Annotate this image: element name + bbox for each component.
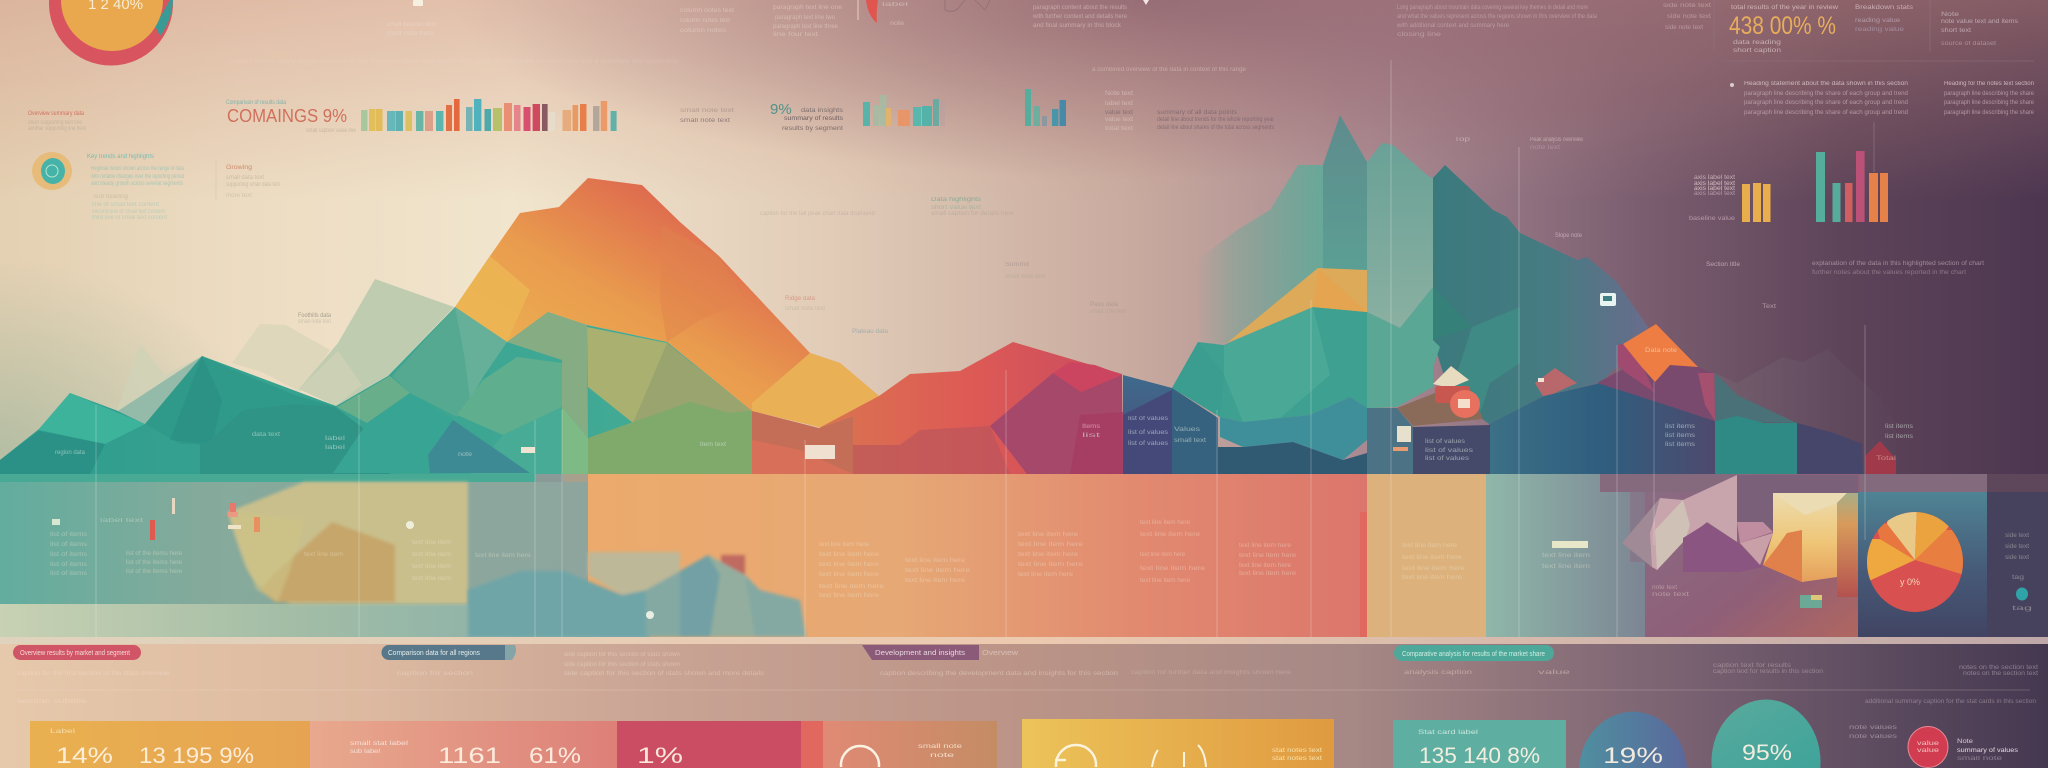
mountain inner text: Values (1174, 427, 1200, 433)
stat card: teal: Stat card label (1418, 730, 1478, 736)
top text row: short note here (386, 31, 435, 37)
stat circle: red with notes: note values (1849, 725, 1897, 731)
lower panel text columns: text line item here (905, 558, 966, 564)
mountain: navy block (1123, 375, 1218, 474)
stat card: yellow with gauges: stat notes text (1272, 756, 1322, 762)
lower panel text columns: text line item here (1239, 553, 1297, 559)
mountain inner text: data text (252, 432, 280, 438)
lower panel text columns: list of items (50, 562, 87, 568)
lower panel text columns: list of items (50, 571, 87, 577)
text block: small callout (216, 160, 280, 200)
percent callout with text: small note text (680, 118, 730, 124)
pie chart: y 0% (1900, 577, 1920, 587)
small white pointer (1143, 0, 1149, 5)
text block: lower centre notes: small caption for details here (931, 211, 1015, 217)
lower panel text columns: list of the items here (126, 569, 183, 575)
bottom captions: caption for section (397, 671, 473, 677)
stat circle: red with notes: small note (1957, 756, 2003, 762)
text block: top right paragraph: side note text (1665, 25, 1703, 31)
mountain inner text: list items (1885, 434, 1913, 440)
stat card: orange: 13 195 9% (139, 743, 254, 768)
lower panel text columns: text line item here (1018, 572, 1074, 578)
stat circle: teal (1712, 700, 1821, 768)
lower panel text columns: text line item here (1018, 532, 1079, 538)
stat card: teal: 135 140 8% (1419, 743, 1540, 768)
text block: right paragraphs: Heading statement about the data shown in this section (1744, 81, 1908, 87)
mountain inner text: list of values (1128, 416, 1168, 422)
lower panel text columns: label text (100, 518, 144, 524)
stat card: yellow with gauges: stat notes text (1272, 748, 1322, 754)
mountain labels: small note text (785, 306, 825, 312)
text block: right paragraphs: paragraph line describing the share (1944, 100, 2035, 106)
text block: teal note: third line of small text content (92, 215, 167, 221)
text block: far top right: source of dataset (1941, 41, 1996, 47)
stat circle: red with notes: Note (1957, 739, 1974, 745)
lower panel text columns: text line item (1542, 564, 1590, 570)
heading: comparison percentage: small caption value line (306, 128, 357, 134)
percent callout with text: small note text (680, 108, 734, 114)
stat card: pink: sub label (350, 749, 380, 755)
stat circle: red with notes: value (1917, 741, 1940, 747)
left top labels: short supporting text line (28, 120, 83, 126)
icon: red crescent (858, 0, 878, 23)
heading: comparison percentage: Comparison of results data (226, 100, 287, 106)
stat circle: teal: 95% (1742, 740, 1792, 765)
mountain inner text: list of values (1425, 448, 1473, 454)
left top labels: another supporting line here (28, 126, 87, 132)
mountain: red foothill (752, 411, 853, 474)
text block: far top right: Note (1941, 12, 1960, 18)
bottom captions (17, 652, 2038, 705)
stat card: pink: 1161 (438, 743, 501, 768)
mountain: navy and teal foreground (1413, 324, 1896, 474)
left top labels: Overview summary data (28, 111, 85, 117)
top left ring chart (49, 0, 173, 66)
lower panel text columns: text line item here (1140, 566, 1206, 572)
mountain labels: Foothills data (298, 313, 332, 319)
bar chart: right coloured bars: axis label text (1694, 186, 1735, 192)
mountain inner text: list (1082, 433, 1101, 439)
bar chart: right coloured bars (1689, 122, 1888, 222)
percent callout with text (680, 101, 843, 132)
stat block: large orange percentage: reading value (1855, 27, 1905, 33)
top text row: paragraph text line one (773, 5, 843, 11)
text block: lower centre notes: short value text (931, 205, 981, 211)
sketch mark (945, 0, 990, 11)
stat card: orange: 14% (56, 743, 113, 768)
lower panel: base strips (0, 474, 2048, 637)
top text row: paragraph content about the results (1033, 5, 1127, 11)
stat block: large orange percentage: reading value (1855, 18, 1901, 24)
text block: lower centre notes (760, 197, 1015, 217)
text block: centre right notes: value text (1105, 110, 1133, 116)
text block: top right paragraph: side note text (1667, 14, 1711, 20)
lower panel text columns: text line item here (819, 552, 880, 558)
lower panel text columns: text line item (412, 552, 451, 558)
bottom section background (0, 644, 2048, 768)
text block: teal note: Regional trends shown across the range of data (91, 166, 184, 172)
stat block: large orange percentage (1714, 0, 2034, 61)
lower panel text columns: text line item here (1140, 520, 1191, 526)
bottom captions: side caption for this section of stats shown (564, 652, 680, 658)
mountain: green range (0, 307, 752, 482)
mountain inner text: list of values (1128, 430, 1168, 436)
lower panel text columns: text line item (412, 564, 451, 570)
text block: top right paragraph: closing line (1397, 32, 1442, 38)
percent callout with text: results by segment (782, 126, 843, 132)
lower panel text columns: side text (2005, 533, 2029, 539)
lower panel text columns: text line item here (475, 553, 532, 559)
bar chart: right coloured bars: axis label text (1694, 191, 1735, 197)
pill label: red: Overview results by market and segment (20, 650, 130, 657)
text block: lower centre notes: caption for the tall peak chart data displayed (760, 211, 875, 217)
top text row: paragraph text line two (775, 15, 836, 21)
text block: right paragraphs: paragraph line describing the share (1944, 91, 2035, 97)
mountain labels: Text (1762, 304, 1776, 310)
text block: teal note: and steady growth across several segments (91, 181, 183, 187)
mountain labels: Pass data (1090, 302, 1119, 308)
stat card: yellow with gauges (1022, 719, 1334, 768)
stat block: large orange percentage: 438 00% % (1729, 12, 1836, 40)
stat card: pink: small stat label (350, 741, 408, 747)
text block: centre right notes: label text (1105, 101, 1133, 107)
stat card: pink (310, 721, 617, 768)
text block: right paragraphs (1730, 81, 2035, 116)
text block: small callout: Growing (226, 165, 252, 171)
top text row: column notes text (680, 8, 734, 14)
top text row: paragraph text line three (773, 24, 839, 30)
text block: centre right notes: detail line about shares of the total across segments (1157, 125, 1274, 131)
text block: top right paragraph: with additional context and summary here (1396, 23, 1510, 29)
text block: centre right notes: summary of all data points (1157, 110, 1237, 116)
pill label: purple (862, 645, 1019, 660)
mountain labels: Top (1454, 137, 1471, 143)
mountain inner text: list of values (1128, 441, 1168, 447)
divider band (0, 637, 2048, 644)
lower panel text columns: text line item here (819, 572, 880, 578)
text block: teal note: Sub heading (93, 194, 128, 200)
stat card: teal (1393, 720, 1566, 768)
stat block: large orange percentage: Breakdown stats (1855, 5, 1913, 11)
top text row: insights across every region overview of the mountain range data points with detail about results for each year and a summary line continuing (228, 59, 678, 65)
lower panel text columns: text line item here (1018, 562, 1084, 568)
bottom captions: analysis caption (1404, 670, 1472, 676)
text block: small callout: small data text (226, 175, 264, 181)
text block: small callout: more text (226, 193, 252, 199)
lower panel text columns: list of items (50, 532, 87, 538)
mountain inner text: region data (55, 450, 86, 456)
lower panel text columns: text line item here (1018, 542, 1084, 548)
mountain inner text: label (325, 436, 345, 442)
icon: spiral badge (32, 152, 72, 190)
vertical guide lines (96, 60, 1865, 637)
mountain labels: Section title (1706, 262, 1741, 268)
mountain inner text: list of values (1425, 439, 1465, 445)
house and icons on the mountain (1393, 293, 1616, 451)
percent callout with text: 9% (770, 101, 792, 118)
bottom captions: caption text for results in this section (1713, 669, 1823, 675)
stat card: red (617, 721, 823, 768)
lower panel: teal hills (468, 552, 806, 637)
lower panel text columns: list of the items here (126, 560, 183, 566)
top text row: note (890, 21, 905, 27)
mountain labels: Peak analysis overview (1530, 137, 1584, 143)
stat card: salmon with ring (823, 721, 997, 768)
lower panel: yellow hill shape (228, 482, 468, 604)
lower panel text columns: text line item (304, 552, 343, 558)
lower panel text columns: text line item here (1239, 543, 1292, 549)
heading: comparison percentage: COMAINGS 9% (227, 105, 347, 126)
pill label: purple: Overview (982, 650, 1019, 657)
bottom captions: additional summary caption for the stat cards in this section (1865, 699, 2036, 705)
lower panel: small markers (52, 445, 1822, 619)
bottom captions: caption for further data and insights shown here (1131, 670, 1292, 676)
lower panel text columns: text line item here (819, 584, 885, 590)
bottom captions: notes on the section text (1959, 665, 2038, 671)
lower panel text columns: list of items (50, 542, 87, 548)
top text row: with further context and details here (1032, 14, 1128, 20)
top text row: small header text (386, 22, 436, 28)
text block: top right paragraph: side note text (1663, 3, 1711, 9)
bar chart: multi-colour strip (361, 99, 617, 131)
mountain inner text: small text (1174, 438, 1206, 444)
text block: centre right notes: detail line about trends for the whole reporting year (1157, 117, 1274, 123)
text block: far top right: note value text and items (1941, 19, 2018, 25)
mountain: gold peak (1227, 268, 1367, 343)
mountain inner text: list items (1665, 433, 1695, 439)
text block: top right paragraph: Long paragraph about mountain data covering several key themes in detail and more (1397, 5, 1589, 11)
stat circle: blue (1579, 712, 1687, 768)
mountain labels: small note text (298, 319, 331, 325)
lower panel text columns: text line item here (1239, 563, 1292, 569)
lower panel text columns: list of the items here (126, 551, 183, 557)
lower panel text columns: text line item here (819, 593, 880, 599)
text block: right paragraphs: paragraph line describing the share (1944, 110, 2035, 116)
text block: centre right notes: a combined overview of the data in context of this range (1092, 67, 1247, 73)
percent callout with text: summary of results (784, 116, 843, 122)
text block: teal note (87, 154, 184, 221)
stat card: orange (30, 721, 310, 768)
faint back mountains (117, 279, 454, 411)
mountain labels: note text (1530, 145, 1560, 151)
text block: far top right: short text (1941, 28, 1971, 34)
mountain labels: Ridge data (785, 296, 816, 302)
stat card: red: 1% (637, 743, 683, 768)
text block: top right paragraph (1396, 3, 1711, 38)
lower panel text columns: text line item here (905, 578, 966, 584)
bottom captions: side caption for this section of stats shown and more details (564, 671, 764, 677)
top text row: label (882, 2, 908, 8)
mountain: far right faint ridge (1714, 349, 1897, 473)
stat circle: red with notes: value (1917, 748, 1940, 754)
top text row (228, 2, 1128, 65)
mountain: orange red peak (455, 178, 879, 428)
pill label: teal: Comparative analysis for results of the market share (1402, 651, 1545, 658)
bottom captions: section subtitle (17, 699, 88, 705)
lower panel text columns: text line item (412, 576, 451, 582)
text block: teal note: Key trends and highlights (87, 154, 154, 160)
stat block: large orange percentage: data reading (1733, 40, 1781, 46)
mountain inner text: note (458, 452, 473, 458)
lower panel text columns: text line item here (1140, 532, 1201, 538)
top text row: and final summary in this block (1033, 23, 1122, 29)
text block: teal note: line of small text content (92, 202, 159, 208)
mountain: tall teal peak (1195, 115, 1650, 474)
mountain: teal central range (1172, 307, 1367, 474)
lower panel text columns: text line item here (1239, 571, 1297, 577)
text block: right paragraphs: paragraph line describing the share of each group and trend (1744, 100, 1908, 106)
bottom captions: value (1538, 670, 1571, 676)
lower panel text columns: list of items (50, 552, 87, 558)
mountain inner text: item text (700, 442, 726, 448)
stat circle: red with notes: summary of values (1957, 748, 2018, 754)
lower panel text columns: tag (2012, 575, 2024, 581)
text block: lower centre notes: Data highlights (931, 197, 981, 203)
icon: teal drop (2016, 588, 2028, 600)
mountain inner text: list items (1665, 442, 1695, 448)
mountain labels: Plateau data (852, 329, 889, 335)
bar chart: small teal bars (1025, 89, 1066, 126)
lower panel text columns: note text (1652, 592, 1690, 598)
bar chart: right coloured bars: axis label text (1694, 181, 1735, 187)
stat block: large orange percentage: short caption (1733, 48, 1781, 54)
text block: far top right (1930, 0, 2018, 52)
mountain inner text: list items (1665, 424, 1695, 430)
mountain inner text: Total (1876, 456, 1896, 462)
text block: teal note: second line of small text content (92, 209, 165, 215)
pill label: teal (1394, 645, 1554, 661)
text block: right paragraphs: paragraph line describing the share of each group and trend (1744, 91, 1908, 97)
lower panel text columns: text line item here (1402, 566, 1466, 572)
lower panel text columns: text line item here (819, 562, 880, 568)
lower panel text columns: side text (2005, 544, 2029, 550)
lower panel text columns: text line item here (1140, 578, 1191, 584)
mountain inner text: list items (1885, 424, 1913, 430)
lower panel text columns: text line item here (819, 542, 870, 548)
text block: centre right notes: Note text (1105, 91, 1133, 97)
lower panel text columns: side text (2005, 555, 2029, 561)
pill label: blue (382, 645, 516, 660)
mountain inner text: list of values (1425, 456, 1469, 462)
percent callout with text: data insights (801, 108, 843, 114)
lower panel text columns: text line item here (1018, 552, 1079, 558)
text block: right paragraphs: paragraph line describing the share of each group and trend (1744, 110, 1908, 116)
stat circle: red with notes (1849, 725, 2018, 768)
lower panel text columns: text line item here (1402, 575, 1463, 581)
lower panel text columns: text line item here (905, 568, 971, 574)
stat card: salmon with ring: small note (918, 744, 963, 750)
pill label: purple: Development and insights (875, 650, 966, 657)
stat card: orange: Label (50, 729, 75, 735)
top text row: line four text (773, 32, 818, 38)
stat circle: blue: 19% (1603, 743, 1663, 768)
lower panel text columns: text line item here (1402, 543, 1458, 549)
text block: centre right notes: total text (1105, 126, 1133, 132)
stat circle: red with notes: note values (1849, 734, 1897, 740)
lower panel text columns: text line item here (1402, 555, 1463, 561)
stat card: pink: 61% (529, 743, 581, 768)
text block: centre right notes: value text (1105, 117, 1133, 123)
lower panel text columns: text line item here (1140, 552, 1186, 558)
text block: top right paragraph: and what the values represent across the regions shown in this overview of the data (1397, 14, 1598, 20)
lower panel text columns: text line item (412, 540, 451, 546)
mountain labels: explanation of the data in this highlighted section of chart (1812, 261, 1984, 267)
top small marker (413, 0, 423, 6)
top text row: column notes (680, 28, 726, 34)
lower panel text columns: note text (1652, 585, 1677, 591)
mountain inner text: Items (1082, 424, 1100, 430)
mountain labels: small note text (1005, 274, 1045, 280)
pie chart (1867, 512, 1963, 612)
pill label: blue: Comparison data for all regions (388, 650, 480, 657)
mountain inner text: label (325, 445, 345, 451)
bar chart: centre cluster (863, 95, 945, 126)
mountain labels: Data note (1645, 348, 1678, 354)
lower panel text columns (50, 518, 2032, 612)
top text row: column notes text (680, 18, 730, 24)
mountain: red peak (819, 342, 1123, 474)
stat block: large orange percentage: total results of the year in review (1731, 5, 1839, 11)
text block: teal note: with notable changes over the reporting period (90, 174, 184, 180)
mountain labels: further notes about the values reported in the chart (1812, 270, 1966, 276)
pill label: red (13, 645, 141, 660)
text block: centre right notes (1092, 67, 1274, 132)
lower panel text columns: tag (2012, 606, 2032, 612)
bottom captions: caption for the first section of the stats overview (17, 671, 170, 677)
bottom captions: side caption for this section of stats shown (564, 662, 680, 668)
text block: right paragraphs: Heading for the notes text section (1944, 81, 2034, 87)
mountain labels: Summit (1005, 262, 1029, 268)
mountain labels (298, 137, 1984, 354)
left top labels (28, 111, 87, 132)
bar chart: right coloured bars: axis label text (1694, 175, 1735, 181)
mountain labels: small note text (1090, 309, 1126, 315)
heading: comparison percentage (226, 100, 357, 134)
lower panel: facet polygons (1622, 475, 1858, 597)
lower panel text columns: text line item (1542, 553, 1590, 559)
bottom captions: notes on the section text (1963, 671, 2038, 677)
bottom captions: caption text for results (1713, 663, 1791, 669)
text block: small callout: supporting small data text (226, 182, 280, 188)
mountain inner text (55, 416, 1913, 462)
stat card: salmon with ring: note (930, 753, 955, 759)
bar chart: right coloured bars: baseline value (1689, 216, 1736, 222)
mountain labels: Slope note (1555, 233, 1583, 239)
bottom captions: caption describing the development data and insights for this section (880, 671, 1118, 677)
